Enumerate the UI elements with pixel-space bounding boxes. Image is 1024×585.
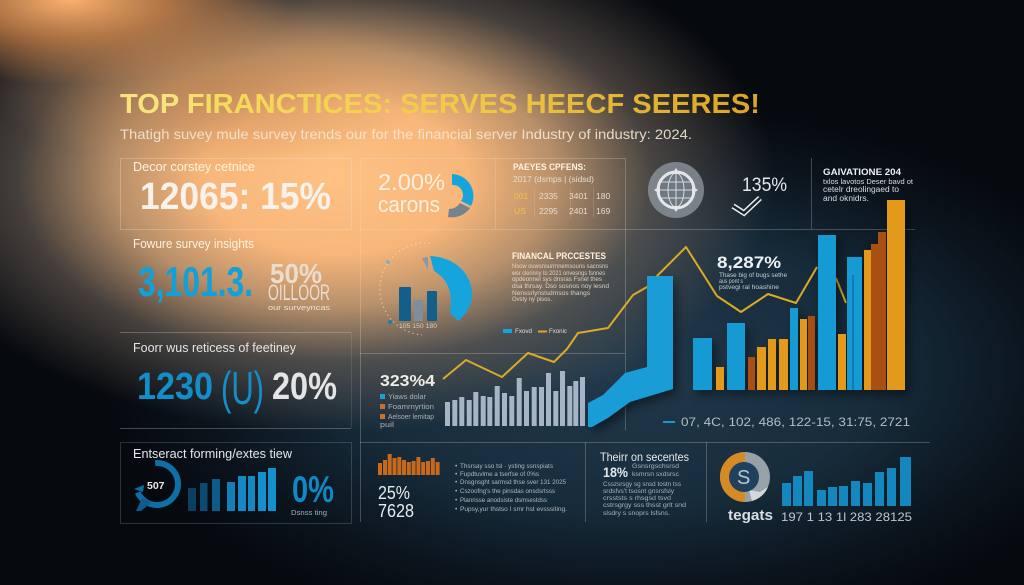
stat block: legend: Aelsoer lemitap <box>388 412 434 421</box>
bar labels: 105 150 180 <box>399 324 438 330</box>
white percentage: 20% <box>272 366 337 408</box>
chart: yellow trend line left <box>443 276 657 379</box>
title: TOP FIRANCTICES: SERVES HEECF SEERES! <box>120 88 760 119</box>
panel: fees <box>120 332 352 428</box>
subtitle: Thatigh suvey mule survey trends our for the financial server Industry of industry: 2024. <box>120 126 692 142</box>
table row 2 <box>514 206 610 216</box>
icon: globe badge <box>648 162 704 218</box>
bulleted list: • <box>455 471 458 478</box>
text block: financial processes: FINANCAL PRCCESTES <box>512 251 606 262</box>
bar chart <box>188 468 276 511</box>
panel label: Entseract forming/extes tiew <box>133 446 293 461</box>
legend: financial: Fxovd <box>515 328 532 335</box>
bulleted list: Dnsgnsght sarmsd thse sver 131 2025 <box>460 479 566 486</box>
bulleted list: Cszoofng's the pinsdas onsdsrtsss <box>460 488 556 495</box>
table row 2: 2295 <box>539 206 558 216</box>
callout: 8,287%: 8,287% <box>717 254 781 272</box>
bulleted list <box>455 463 567 513</box>
callout: 8,287%: aus pont s <box>719 278 744 285</box>
stat block: legend: puil <box>380 420 394 429</box>
table row 1: 2335 <box>539 191 558 201</box>
callout: 8,287% <box>717 254 787 291</box>
text block: secentes: Theirr on secentes <box>600 450 689 464</box>
stat block: legend <box>380 373 435 429</box>
text block: financial processes: Ovsty ny pisos. <box>512 296 552 303</box>
callout: 8,287%: Thase big of bugs sethe <box>719 272 787 279</box>
caption: Dsnss ting <box>291 508 327 517</box>
inner bars <box>399 287 437 321</box>
bulleted list: Planrisse anodsiste dsmsestdss <box>460 497 548 504</box>
text block: secentes: srdsfvs't tsosnt gnsrsfsly <box>603 488 675 495</box>
table header row: 2017 (dsmps | (sidsd) <box>513 174 594 184</box>
panel: survey insights <box>133 236 330 312</box>
table row 1: 3401 <box>569 191 588 201</box>
note: gaivatione: txlos lavotos Deser bavd ot <box>823 179 913 186</box>
chart: yellow trend line right <box>657 247 846 312</box>
bulleted list: • <box>455 488 458 495</box>
radial arc <box>430 256 472 321</box>
text block: secentes: 18% <box>603 464 628 480</box>
bulleted list: Pupsy,yur thstso I smr hst evsssiting. <box>460 506 567 513</box>
table row 1 <box>514 191 610 201</box>
donut chart <box>448 174 473 217</box>
text block: financial processes: opdeonnel sys dnsras Fsnel thes <box>512 276 603 283</box>
table row 1: 180 <box>596 191 610 201</box>
text block: financial processes: Nenssrlynslsdrnsos thangs <box>512 290 591 297</box>
icon: S donut <box>720 452 770 502</box>
legend: financial <box>503 328 568 335</box>
text block: secentes: Gsnsrgschsrsd <box>632 463 679 470</box>
text block: secentes: ksmrsn sxdsrsc <box>632 471 680 478</box>
bulleted list: • <box>455 497 458 504</box>
text block: financial processes: Nsow ouwsnsurrnnemsouns sacnsns <box>512 263 609 270</box>
stat block: legend: Yiaws dolar <box>388 392 426 401</box>
text block: financial processes: dsa thrsay. Dso sosnos noy lesnd <box>512 283 609 290</box>
icon: check mark <box>733 198 760 213</box>
percentage: 0% <box>292 469 334 510</box>
stat word: carons <box>378 192 440 217</box>
chart: tall bars <box>818 200 905 390</box>
stat: 25% 7628: 25% <box>378 483 410 503</box>
table heading: PAEYES CPFENS: <box>513 162 586 173</box>
icon: gauge: 507 <box>147 480 165 492</box>
panel: radial bar chart <box>380 243 472 335</box>
table row 1: 001 <box>514 191 528 201</box>
chart caption: tegats <box>728 507 773 524</box>
side word: OILLOOR <box>268 280 330 305</box>
bulleted list: Fupdtuvlme a tserfse of 0%s <box>460 471 540 478</box>
text block: secentes: crsststs s rhsgsd tsvd <box>603 495 671 502</box>
side caption: our surveyncas <box>268 303 330 312</box>
text block: secentes <box>600 450 689 517</box>
bulleted list: Thsrsay sso tsl · ysting ssnspiats <box>460 463 554 470</box>
big blue number: 3,101.3. <box>138 258 253 305</box>
note: gaivatione: GAIVATIONE 204 <box>823 167 902 178</box>
table row 2: US <box>514 206 526 216</box>
stat block: legend: Foamrnyrtion <box>388 402 434 411</box>
icon: S donut: S <box>737 467 750 489</box>
side percentage: 50% <box>270 258 322 289</box>
chart: blue area arrow <box>588 276 673 427</box>
panel label: Decor corstey cetnice <box>133 159 255 174</box>
chart: right column bars <box>693 308 815 390</box>
note: gaivatione <box>823 167 913 203</box>
stat: 25% 7628 <box>378 483 414 521</box>
text block: secentes: cstrsgrgy sss thsst grlt snd <box>603 502 686 509</box>
chart: orange mini bars <box>378 454 440 475</box>
panel label: Foorr wus reticess of feetiney <box>133 340 296 355</box>
text block: financial processes <box>511 251 609 303</box>
panel: headline stat <box>120 158 352 230</box>
text block: financial processes: wsr clerinny to 2021 onvesngs fsnnes <box>511 270 606 277</box>
note: gaivatione: and oknidrs. <box>823 194 869 203</box>
callout: 8,287%: pstvegi ral hoashine <box>719 284 779 291</box>
icon: gauge <box>134 461 180 511</box>
note: gaivatione: cetelr dreolingaed to <box>823 185 900 194</box>
chart axis numbers: 197 1 13 1l 283 28125 <box>781 510 912 524</box>
stat 135%: 135% <box>742 175 787 196</box>
panel: forming <box>120 442 352 524</box>
table row 2: 2401 <box>569 206 588 216</box>
stat block: legend: 323%4 <box>380 373 435 390</box>
stat value: 2.00% <box>378 169 445 195</box>
bulleted list: • <box>455 463 458 470</box>
bulleted list: • <box>455 506 458 513</box>
big number: 12065: 15% <box>140 176 331 218</box>
chart: bottom blue bars <box>782 457 911 506</box>
axis labels: 07, 4C, 102, 486, 122-15, 31:75, 2721 <box>681 415 910 429</box>
panel label: Fowure survey insights <box>133 236 254 251</box>
text block: secentes: Csszsrsgy sg snsd tostn tss <box>603 481 682 488</box>
stat: 25% 7628: 7628 <box>378 501 414 521</box>
bracket glyph: (U) <box>221 362 264 414</box>
table row 2: 169 <box>596 206 610 216</box>
chart: grey bars <box>445 371 585 426</box>
bulleted list: • <box>455 479 458 486</box>
legend: financial: Fxonic <box>549 328 568 335</box>
blue number: 1230 <box>137 366 213 408</box>
panel: donut stat <box>378 169 473 217</box>
text block: secentes: slsdry s snoprs lsfsns. <box>603 510 670 517</box>
panel: data table <box>513 162 610 218</box>
